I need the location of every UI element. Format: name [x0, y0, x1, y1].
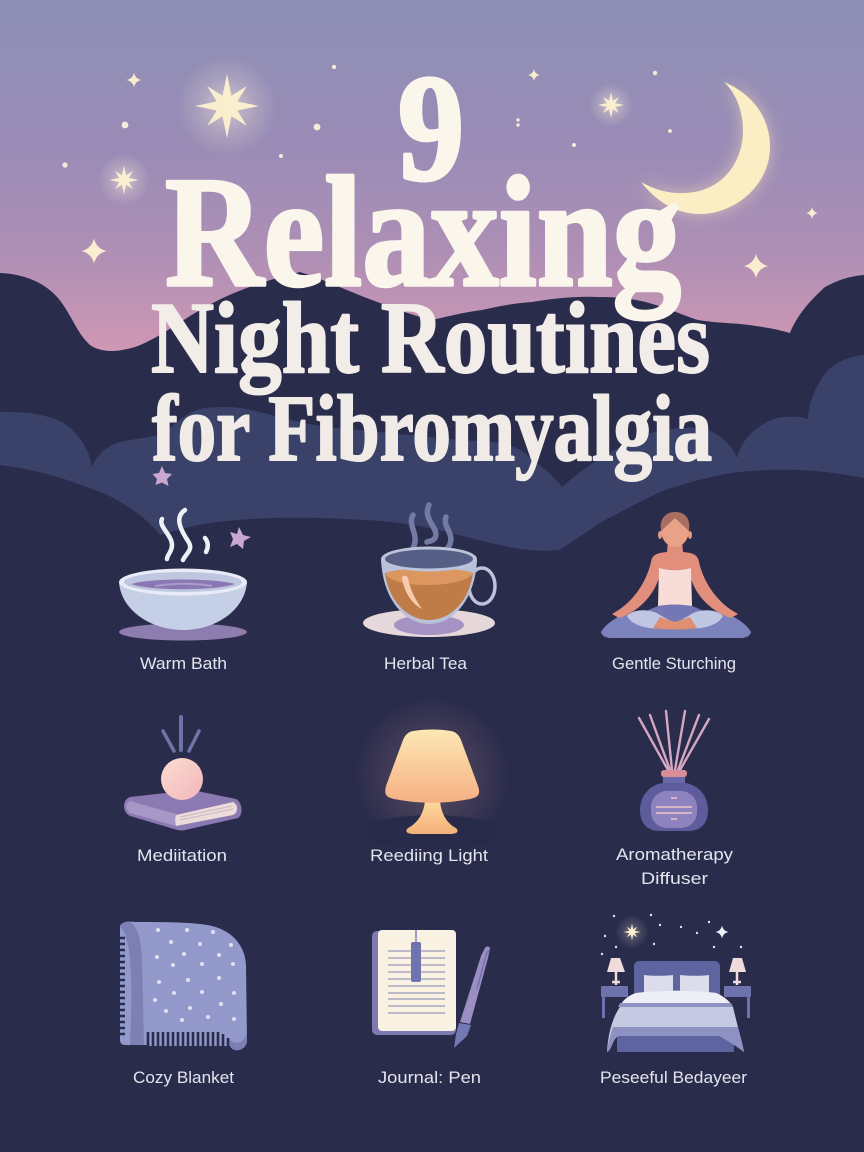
item: journal and pen — [372, 930, 490, 1087]
item: reading light — [354, 697, 510, 865]
fringe — [119, 938, 125, 1034]
front dark hill — [0, 465, 864, 1152]
item: peaceful bedlayer — [600, 914, 751, 1087]
sky stars and moon — [62, 56, 818, 278]
label: reading light: Reediing Light — [370, 846, 488, 865]
label: aromatherapy diffuser: Aromatherapy — [616, 845, 734, 864]
label: herbal tea: Herbal Tea — [384, 654, 468, 673]
label: aromatherapy diffuser — [616, 845, 734, 888]
title line: Relaxing: Relaxing — [165, 145, 681, 320]
title — [151, 44, 712, 481]
icon: bottle — [640, 770, 708, 831]
icon: steam — [411, 505, 451, 549]
icon: bed — [607, 961, 744, 1052]
title line: Night Routines: Night Routines — [151, 282, 710, 395]
icon: saucer — [363, 609, 495, 637]
label: meditation: Mediitation — [137, 846, 227, 865]
label: gentle stretching: Gentle Sturching — [612, 654, 736, 673]
back dark hills — [0, 272, 864, 520]
glowing star right — [589, 83, 633, 127]
label: cozy blanket: Cozy Blanket — [133, 1068, 234, 1087]
item: herbal tea — [363, 505, 495, 673]
dots — [153, 928, 236, 1022]
item: aromatherapy diffuser — [616, 711, 734, 888]
icon: mat — [601, 613, 751, 638]
icon: book — [124, 790, 242, 830]
icon: journal — [372, 930, 456, 1035]
icon: cup — [381, 546, 495, 624]
icon: lamp glow — [354, 697, 510, 853]
four-point stars — [82, 69, 818, 278]
icon: table shadow — [364, 815, 500, 849]
icon: seated figure — [612, 512, 738, 630]
icon: right nightstand and lamp — [724, 958, 751, 1018]
moon outer halo — [641, 82, 770, 214]
crescent moon — [641, 82, 770, 214]
icon: steam — [161, 510, 208, 560]
icon: reeds — [639, 711, 709, 770]
icon: lamp stem — [406, 800, 458, 834]
icon: blanket — [119, 922, 247, 1050]
large star — [177, 56, 277, 156]
title line: for Fibromyalgia: for Fibromyalgia — [152, 377, 712, 481]
icon: saucer shadow — [394, 615, 464, 635]
icon: rays — [163, 717, 199, 751]
item: gentle stretching — [601, 512, 751, 673]
decorative star under title — [152, 466, 172, 486]
item: warm bath — [119, 510, 251, 673]
glowing star left — [98, 154, 150, 206]
night sky background — [0, 0, 864, 360]
label: peaceful bedlayer: Peseeful Bedayeer — [600, 1068, 747, 1087]
icon: lamp shade — [385, 730, 479, 803]
icon: bed sparkle stars — [601, 914, 742, 955]
icon: left nightstand and lamp — [601, 958, 628, 1018]
base dark background — [0, 400, 864, 1152]
title number 9: 9 — [398, 44, 464, 212]
label: warm bath: Warm Bath — [140, 654, 227, 673]
blue cloud layer — [0, 355, 864, 600]
label: journal and pen: Journal: Pen — [378, 1068, 481, 1087]
item: meditation — [124, 717, 242, 865]
icon: pen — [454, 946, 490, 1048]
icon: bowl — [119, 568, 247, 640]
icon: sphere — [161, 758, 203, 800]
star dots — [62, 65, 672, 168]
icon: star — [230, 527, 251, 549]
item: cozy blanket — [119, 922, 247, 1087]
label: aromatherapy diffuser: Diffuser — [641, 869, 708, 888]
